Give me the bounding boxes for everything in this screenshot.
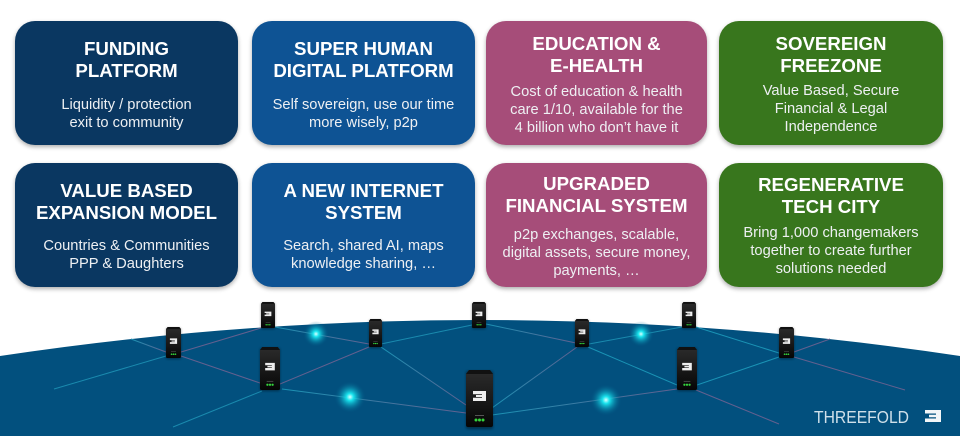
heading: sovereign freezone: SOVEREIGN [776, 33, 886, 54]
text: internet system description: Search, shared AI, maps [283, 238, 444, 254]
text: tech city description: together to create further [750, 243, 912, 259]
heading: regenerative tech city: REGENERATIVE [758, 174, 904, 195]
panel: value based expansion model [15, 163, 238, 287]
heading: value based expansion model [36, 180, 217, 223]
text: financial system description: p2p exchanges, scalable, [514, 227, 679, 243]
text: expansion model description [43, 238, 210, 272]
heading: a new internet system [284, 180, 444, 223]
heading: education and e-health: EDUCATION & [532, 33, 661, 54]
text: education description: care 1/10, available for the [510, 102, 683, 118]
text: funding platform description [61, 97, 192, 131]
heading: upgraded financial system [505, 173, 688, 216]
globe surface [0, 320, 960, 436]
heading: funding platform: FUNDING [84, 38, 169, 59]
heading: super human digital platform: SUPER HUMAN [294, 38, 433, 59]
heading: a new internet system: A NEW INTERNET [284, 180, 443, 201]
panel: sovereign freezone [719, 21, 943, 145]
heading: value based expansion model: EXPANSION MODEL [36, 202, 217, 223]
text: education description [510, 84, 683, 136]
text: tech city description: solutions needed [776, 261, 886, 277]
text: education description: Cost of education & health [511, 84, 682, 100]
glowing data pulses [303, 321, 654, 416]
heading: super human digital platform: DIGITAL PLATFORM [273, 60, 454, 81]
panel: a new internet system [252, 163, 475, 287]
panel: regenerative tech city [719, 163, 943, 287]
heading: super human digital platform [273, 38, 454, 81]
text: freezone description: Value Based, Secure [763, 83, 899, 99]
heading: value based expansion model: VALUE BASED [60, 180, 193, 201]
heading: upgraded financial system: UPGRADED [543, 173, 650, 194]
panel: funding platform [15, 21, 238, 145]
server nodes [166, 302, 794, 429]
text: tech city description: Bring 1,000 changemakers [743, 225, 919, 241]
text: digital platform description: Self sovereign, use our time [273, 97, 454, 113]
panel: super human digital platform [252, 21, 475, 145]
text: freezone description [762, 83, 899, 135]
text: financial system description: digital assets, secure money, [503, 245, 690, 261]
panel: education and e-health [486, 21, 707, 145]
text: financial system description [503, 227, 690, 279]
heading: upgraded financial system: FINANCIAL SYSTEM [505, 195, 688, 216]
text: financial system description: payments, … [553, 263, 640, 279]
heading: regenerative tech city [758, 174, 904, 217]
network links [54, 324, 905, 427]
text: expansion model description: PPP & Daughters [69, 256, 184, 272]
panel: upgraded financial system [486, 163, 707, 287]
text: internet system description: knowledge sharing, … [291, 256, 436, 272]
text: digital platform description: more wisely, p2p [309, 115, 418, 131]
text: freezone description: Financial & Legal [775, 101, 887, 117]
heading: funding platform: PLATFORM [75, 60, 178, 81]
text: internet system description [283, 238, 444, 272]
text: expansion model description: Countries & Communities [43, 238, 210, 254]
icon: ThreeFold logo [925, 410, 941, 422]
heading: education and e-health: E-HEALTH [550, 55, 643, 76]
heading: regenerative tech city: TECH CITY [782, 196, 880, 217]
ThreeFold wordmark: THREEFOLD [814, 407, 909, 427]
text: funding platform description: exit to community [69, 115, 184, 131]
heading: funding platform [75, 38, 178, 81]
text: tech city description [743, 225, 919, 277]
heading: a new internet system: SYSTEM [325, 202, 402, 223]
text: education description: 4 billion who don’t have it [515, 120, 678, 136]
heading: education and e-health [532, 33, 661, 76]
heading: sovereign freezone [776, 33, 886, 76]
text: freezone description: Independence [785, 119, 877, 135]
heading: sovereign freezone: FREEZONE [780, 55, 882, 76]
text: funding platform description: Liquidity / protection [61, 97, 192, 113]
text: digital platform description [273, 97, 454, 131]
